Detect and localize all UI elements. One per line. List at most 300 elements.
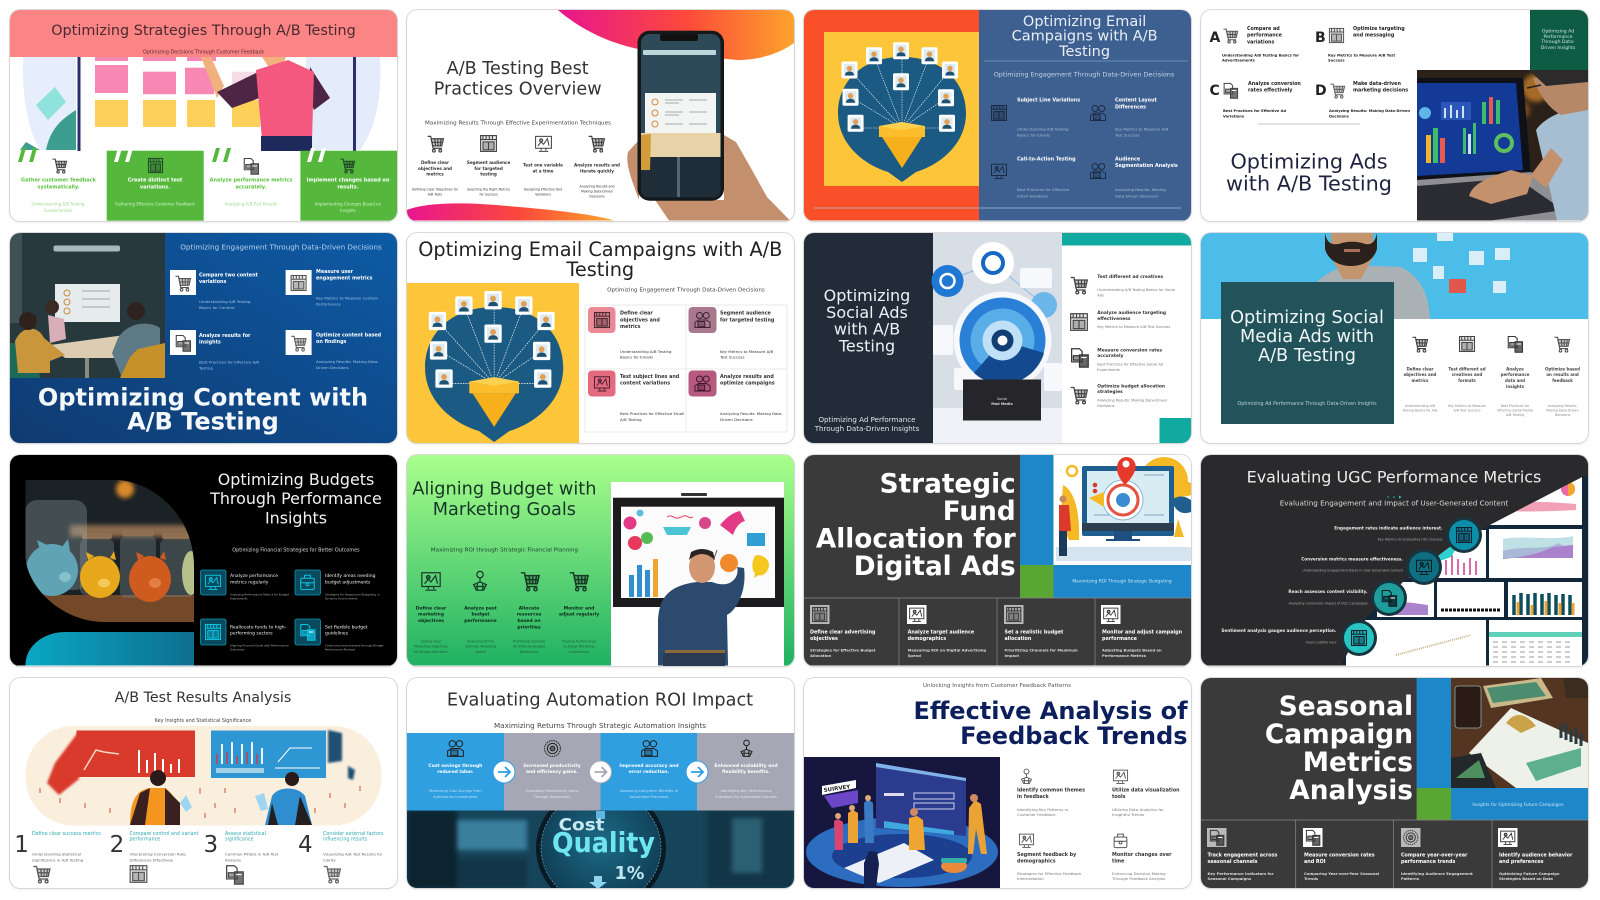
item: optimize: Driven Decisions bbox=[316, 364, 349, 370]
item: define: Define clear bbox=[620, 310, 653, 316]
subtitle: Optimizing Engagement Through Data-Driven Decisions bbox=[180, 242, 382, 251]
item: targeting: Key Metrics to Measure A/B Test Success bbox=[1097, 324, 1170, 328]
column: track: Track engagement across bbox=[1208, 852, 1277, 858]
item: define: metrics bbox=[620, 324, 641, 330]
column: analyze: Analyze target audience bbox=[908, 629, 975, 635]
item: segment: for targeted testing bbox=[720, 317, 775, 323]
step: optimize: Making Data-Driven bbox=[1546, 408, 1579, 412]
step: define bbox=[412, 136, 459, 196]
item C: Variations bbox=[1223, 114, 1245, 118]
step: segment: for Success bbox=[479, 192, 498, 196]
step 4: Visualizing A/B Test Results for bbox=[323, 851, 383, 856]
title box: Media Ads with bbox=[1240, 326, 1374, 346]
column: define: Allocation bbox=[810, 654, 831, 658]
step: productivity bbox=[504, 732, 601, 810]
subtitle: Maximizing Returns Through Strategic Automation Insights bbox=[494, 720, 706, 730]
step: monitor: Investments bbox=[569, 650, 589, 654]
dark sidebar: Optimizing bbox=[824, 286, 910, 304]
step: segment: testing bbox=[480, 172, 497, 177]
step: test: A/B Test Success bbox=[1453, 408, 1481, 412]
column: implement changes: Insights bbox=[340, 208, 356, 213]
step: cost savings: Measuring Cost Savings from bbox=[429, 788, 482, 792]
title: Optimizing Content with bbox=[38, 383, 368, 411]
step: define: objectives and bbox=[418, 166, 452, 171]
item: reallocate: performing sectors bbox=[230, 630, 273, 636]
step: test: Test one variable bbox=[523, 163, 563, 168]
step: define: Define clear bbox=[421, 160, 450, 165]
metric: engagement bbox=[1334, 517, 1482, 553]
metric: reach bbox=[1288, 580, 1407, 616]
item: themes: Customer Feedback bbox=[1017, 812, 1056, 816]
title: Seasonal bbox=[1279, 690, 1413, 722]
step: analyze: insights bbox=[1506, 384, 1525, 389]
item: budget: Decisions bbox=[1097, 404, 1115, 408]
column: budget: allocation bbox=[1004, 636, 1032, 642]
item B: Success bbox=[1328, 59, 1345, 63]
step: define: A/B Tests bbox=[428, 192, 443, 196]
arrow 2 bbox=[590, 760, 612, 782]
column: analyze metrics: accurately. bbox=[236, 184, 267, 190]
arrow 1 bbox=[493, 760, 515, 782]
panel: A/B Test Results Analysis bbox=[10, 678, 397, 888]
column: analyze: demographics bbox=[908, 636, 946, 642]
subtitle: Optimizing Engagement Through Data-Driven Decisions bbox=[994, 71, 1175, 79]
item: creatives: Test different ad creatives bbox=[1097, 274, 1163, 280]
step: analyze: Analyze past bbox=[464, 605, 498, 611]
arrow 3 bbox=[686, 760, 708, 782]
right accent blocks bbox=[1062, 232, 1191, 443]
step: analyze: Effective Social Media bbox=[1497, 408, 1533, 412]
step 3: Assess statistical bbox=[225, 830, 266, 836]
title: Evaluating UGC Performance Metrics bbox=[1247, 467, 1541, 486]
subtitle: Maximizing ROI through Strategic Financial Planning bbox=[431, 548, 578, 554]
column: implement changes bbox=[300, 148, 397, 221]
step 2: Differences Effectively bbox=[130, 857, 174, 862]
item: creatives: Understanding A/B Testing Basics for Social bbox=[1097, 288, 1175, 292]
item: segment: Strategies for Effective Feedback bbox=[1017, 870, 1082, 876]
item: call to action bbox=[992, 156, 1076, 199]
column: gather feedback: Understanding A/B Testing bbox=[32, 202, 85, 207]
item D: Analyzing Results: Making Data-Driven bbox=[1329, 109, 1411, 113]
panel: A/B Testing Best Practices Overview bbox=[407, 10, 794, 220]
panel: Aligning Budget with Marketing Goals bbox=[407, 455, 794, 666]
item: monitor: Monitor changes over bbox=[1112, 852, 1172, 858]
item: segment: Interpretation bbox=[1017, 876, 1044, 880]
item C: Best Practices for Effective Ad bbox=[1223, 109, 1286, 113]
column: implement changes: Implement changes based on bbox=[307, 178, 390, 184]
illustration: target dashboard: Social bbox=[997, 396, 1007, 400]
item: identify: Identify areas needing bbox=[325, 573, 376, 579]
item: analyze: metrics regularly bbox=[230, 579, 269, 585]
item: budget bbox=[1071, 383, 1167, 408]
step: optimize bbox=[1545, 337, 1580, 416]
column: track: Key Performance Indicators for bbox=[1208, 872, 1274, 876]
step: define: metrics bbox=[1412, 378, 1429, 383]
subtitle: Unlocking Insights from Customer Feedback Patterns bbox=[923, 682, 1071, 688]
column: monitor: Performance Metrics bbox=[1102, 654, 1147, 658]
item: conversion: Best Practices for Effective Social Ad bbox=[1097, 362, 1163, 366]
item: monitor: Enhancing Decision-Making bbox=[1112, 870, 1166, 876]
item D bbox=[1315, 81, 1411, 118]
step: define bbox=[414, 573, 448, 654]
photo: Cost Quality magnifier: Quality bbox=[552, 826, 655, 858]
step 1: 1 bbox=[14, 832, 29, 858]
column: compare bbox=[1401, 828, 1473, 880]
divider line bbox=[1201, 820, 1588, 888]
item: optimize bbox=[286, 330, 382, 370]
step: allocate: Prioritizing Channels bbox=[513, 640, 546, 644]
step: allocate: based on bbox=[517, 618, 541, 624]
fan graphic bbox=[407, 282, 579, 443]
item: audience segmentation: Analyzing Results: Making bbox=[1115, 187, 1166, 192]
item B: Key Metrics to Measure A/B Test bbox=[1328, 54, 1395, 58]
item A bbox=[1210, 26, 1299, 63]
illustration: survey scene bbox=[804, 756, 1000, 888]
metric: sentiment: Sentiment analysis gauges audience perception. bbox=[1221, 628, 1337, 633]
step: define: Understanding A/B bbox=[1405, 404, 1435, 408]
item: subject line bbox=[992, 98, 1080, 138]
title box: Optimizing Ad Performance Through Data-Driven Insights bbox=[1237, 400, 1377, 406]
title band: Optimizing Strategies Through A/B Testing bbox=[51, 23, 356, 39]
step: analyze: Analyzing Results and bbox=[579, 185, 615, 189]
column: compare: Patterns bbox=[1401, 876, 1420, 880]
step: define: Define clear bbox=[416, 605, 447, 611]
column: create variations: Create distinct test bbox=[128, 178, 183, 184]
step: allocate: Allocate bbox=[519, 605, 539, 611]
item: segment: demographics bbox=[1017, 858, 1056, 864]
item: compare: Compare two content bbox=[199, 272, 259, 278]
subtitle: Maximizing Results Through Effective Experimentation Techniques bbox=[425, 121, 611, 127]
item C bbox=[1210, 81, 1301, 118]
title: Digital Ads bbox=[854, 552, 1016, 582]
metric: engagement: Key Metrics for Evaluating UGC Success bbox=[1378, 538, 1443, 542]
step: define: Defining Clear Objectives for bbox=[412, 188, 459, 192]
step: test: Test different ad bbox=[1448, 366, 1486, 371]
step: segment bbox=[467, 136, 510, 196]
step 1: Significance in A/B Testing bbox=[32, 857, 84, 862]
item C: rates effectively bbox=[1248, 88, 1293, 94]
metric: sentiment: Insert subtitle here bbox=[1306, 641, 1336, 645]
panel: Optimizing Content with A/B Testing bbox=[10, 232, 397, 443]
photo: Cost Quality magnifier: Cost bbox=[558, 815, 604, 835]
column: monitor: Monitor and adjust campaign bbox=[1102, 629, 1183, 635]
accent blocks bbox=[1020, 455, 1191, 598]
item: audience segmentation bbox=[1090, 156, 1178, 199]
item: identify bbox=[295, 570, 380, 601]
dark sidebar: Optimizing Ad Performance bbox=[818, 414, 916, 424]
item: segment: Segment audience bbox=[720, 310, 771, 316]
item: analyze: Analyze performance bbox=[230, 573, 278, 579]
title: Campaigns with A/B bbox=[1012, 29, 1158, 45]
title: Testing bbox=[565, 258, 634, 280]
panel: Optimizing Social Media Ads with A/B Testing bbox=[1201, 232, 1588, 443]
step 3: Analysis bbox=[225, 857, 241, 862]
step 1: Define clear success metrics bbox=[32, 830, 101, 836]
column: gather feedback: systematically. bbox=[37, 184, 80, 190]
column: identify: Optimizing Future Campaign bbox=[1499, 872, 1560, 876]
step: allocate: resources bbox=[517, 612, 542, 618]
column: define bbox=[810, 605, 876, 658]
divider line bbox=[804, 598, 1191, 666]
column: monitor: performance bbox=[1102, 636, 1138, 642]
step: productivity: and efficiency gains. bbox=[526, 768, 578, 774]
item: themes: Identifying Key Patterns in bbox=[1017, 806, 1069, 812]
green tag: Through Data- bbox=[1540, 39, 1575, 45]
step 2: Compare control and variant bbox=[130, 830, 199, 836]
column: identify bbox=[1498, 828, 1573, 880]
step: monitor bbox=[559, 573, 599, 654]
column: monitor: Adjusting Budgets Based on bbox=[1102, 649, 1162, 653]
metric: engagement: Engagement rates indicate audience interest. bbox=[1334, 525, 1443, 530]
item: flexible: Set flexible budget bbox=[325, 624, 368, 630]
step: monitor: Monitor and bbox=[564, 605, 594, 611]
panel: Optimizing Strategies Through A/B Testing bbox=[10, 10, 397, 220]
step: allocate bbox=[513, 573, 546, 654]
step: scalability: Indicators for Automation Success bbox=[715, 794, 777, 798]
item: visualization: Insightful Trends bbox=[1112, 812, 1144, 816]
item: content layout bbox=[1090, 98, 1169, 138]
item: analyze bbox=[688, 370, 783, 422]
column: define: Define clear advertising bbox=[810, 629, 876, 635]
item: analyze: optimize campaigns bbox=[720, 380, 775, 386]
step: define: metrics bbox=[426, 172, 444, 177]
item: audience segmentation: Segmentation Analysis bbox=[1115, 163, 1178, 169]
step: analyze bbox=[1497, 336, 1533, 416]
step: analyze: budget bbox=[471, 612, 490, 618]
column: analyze bbox=[907, 605, 986, 658]
item B: B bbox=[1315, 30, 1326, 46]
column: measure: Trends bbox=[1304, 876, 1319, 880]
step: analyze bbox=[464, 571, 498, 654]
item A: Understanding A/B Testing Basics for bbox=[1222, 54, 1299, 58]
column: analyze metrics: Analyze performance metrics bbox=[210, 178, 292, 184]
step: test: Designing Effective Test bbox=[524, 188, 563, 192]
column: implement changes: results. bbox=[337, 184, 359, 190]
column: compare: Compare year-over-year bbox=[1401, 852, 1468, 858]
item: visualization: Utilizing Data Analytics for bbox=[1112, 806, 1164, 812]
step: accuracy: Automated Processes bbox=[630, 794, 669, 798]
item: content layout: Test Success bbox=[1114, 133, 1140, 138]
item: compare: variations bbox=[199, 279, 226, 285]
step 3: significance bbox=[225, 836, 254, 842]
step: analyze: performance bbox=[464, 618, 497, 624]
illustration: survey scene: SUIRVEY bbox=[823, 784, 852, 793]
step: optimize: Optimize based bbox=[1545, 366, 1580, 371]
item D: marketing decisions bbox=[1353, 88, 1408, 94]
subtitle: Optimizing Financial Strategies for Better Outcomes bbox=[232, 548, 360, 554]
subtitle: Key Insights and Statistical Significance bbox=[155, 717, 251, 723]
step 4: Consider external factors bbox=[323, 830, 384, 836]
item: compare bbox=[170, 270, 259, 309]
step 2: performance bbox=[130, 836, 160, 842]
title: Testing bbox=[1058, 44, 1110, 60]
item: conversion: Measure conversion rates bbox=[1097, 347, 1162, 353]
metric: reach: Reach assesses content visibility. bbox=[1288, 589, 1368, 594]
step: analyze: Analyzing ROI to bbox=[467, 640, 494, 644]
item: segment: Key Metrics to Measure A/B bbox=[720, 348, 774, 353]
item: compare: Basics for Content bbox=[199, 304, 235, 309]
title: with A/B Testing bbox=[1226, 172, 1392, 196]
step: scalability: flexibility benefits. bbox=[722, 768, 770, 774]
metric: conversion: Understanding Engagement Rates in User-Generated Content bbox=[1302, 568, 1404, 572]
step 3: Common Pitfalls in A/B Test bbox=[225, 851, 279, 856]
item: call to action: Call-to-Action Testing bbox=[1017, 156, 1076, 162]
item: reallocate bbox=[200, 619, 289, 652]
item: segment: Segment feedback by bbox=[1017, 852, 1077, 858]
item A: variations bbox=[1247, 39, 1274, 45]
item C: C bbox=[1210, 83, 1220, 99]
teal block bbox=[26, 632, 194, 666]
step: accuracy bbox=[600, 732, 697, 810]
step: scalability bbox=[697, 732, 794, 810]
panel: Effective Analysis of Feedback Trends bbox=[804, 678, 1191, 888]
title: Analysis bbox=[1289, 774, 1413, 806]
column: monitor bbox=[1101, 605, 1183, 658]
step: test: at a time bbox=[533, 169, 554, 174]
step: productivity: Through Automation bbox=[533, 794, 570, 798]
item A: Advertisements bbox=[1222, 59, 1256, 63]
title: Optimizing Budgets bbox=[218, 470, 374, 489]
dividers bbox=[984, 60, 1188, 62]
item: audience segmentation: Data-Driven Decisions bbox=[1115, 194, 1158, 199]
step: optimize: feedback bbox=[1552, 378, 1573, 383]
step: optimize: Analyzing Results: bbox=[1548, 404, 1577, 408]
item: audience segmentation: Audience bbox=[1115, 156, 1141, 162]
step: analyze: performance bbox=[1501, 372, 1530, 377]
photo: person at laptop analytics bbox=[1417, 70, 1588, 220]
step: analyze: Analyze bbox=[1506, 366, 1524, 371]
step: segment: for targeted bbox=[474, 166, 503, 171]
item: targeting: effectiveness bbox=[1097, 316, 1131, 322]
item: test: content variations bbox=[620, 380, 670, 386]
title: Metrics bbox=[1303, 746, 1413, 778]
column: analyze metrics: Analyzing A/B Test Results bbox=[225, 202, 277, 207]
item: themes: in feedback bbox=[1017, 794, 1050, 800]
item: measure: engagement metrics bbox=[316, 275, 373, 281]
item B bbox=[1315, 26, 1405, 63]
column: budget: Set a realistic budget bbox=[1004, 629, 1064, 635]
item: conversion: Experiments bbox=[1097, 368, 1120, 372]
illustration: hand holding phone bbox=[627, 31, 790, 221]
step: define: Define clear bbox=[1406, 366, 1434, 371]
item: measure: Key Metrics to Measure Content bbox=[316, 295, 379, 300]
column: create variations: Gathering Effective Customer Feedback bbox=[115, 202, 196, 207]
step: define: Setting Clear bbox=[421, 640, 442, 644]
step: allocate: priorities bbox=[517, 624, 541, 630]
item: monitor: Through Feedback Analysis bbox=[1111, 876, 1165, 880]
step 4: Clarity bbox=[323, 857, 336, 862]
step: test: Key Metrics to Measure bbox=[1448, 404, 1486, 408]
step: productivity: Evaluating Productivity Gains bbox=[526, 788, 579, 792]
item: content layout: Key Metrics to Measure A/B bbox=[1115, 127, 1169, 132]
title: Through Performance bbox=[209, 489, 382, 508]
item: measure bbox=[286, 268, 379, 306]
item: creatives: Ads bbox=[1097, 293, 1104, 297]
title: Strategic bbox=[880, 470, 1016, 500]
step: cost savings: Cost savings through bbox=[428, 762, 482, 768]
item: call to action: Email Variations bbox=[1017, 194, 1048, 199]
item: analyze: Analyzing Results: Making Data- bbox=[720, 410, 783, 416]
item: compare: Understanding A/B Testing bbox=[199, 298, 251, 303]
item: reallocate: Aligning Financial Goals with Performance bbox=[230, 644, 289, 648]
item: segment: Test Success bbox=[719, 354, 745, 359]
step 1 bbox=[14, 830, 101, 882]
column: identify: Strategies Based on Data bbox=[1499, 876, 1553, 880]
illustration: analysts with charts bbox=[26, 726, 382, 825]
column: analyze: Spend bbox=[908, 654, 921, 658]
item: content layout: Content Layout bbox=[1115, 98, 1158, 104]
column: gather feedback: Fundamentals bbox=[44, 208, 72, 213]
dashboard wedge bbox=[1341, 474, 1588, 666]
item: call to action: Best Practices for Effective bbox=[1017, 187, 1070, 192]
column: compare: Identifying Audience Engagement bbox=[1401, 872, 1473, 876]
step: accuracy: error reduction. bbox=[629, 768, 670, 774]
step: optimize: Decisions bbox=[1555, 412, 1571, 416]
column: budget bbox=[1004, 605, 1078, 658]
item: analyze: Testing bbox=[198, 365, 213, 370]
column: implement changes: Implementing Changes Based on bbox=[315, 202, 382, 207]
step: allocate: Distribution bbox=[520, 650, 538, 654]
column: create variations bbox=[107, 148, 204, 221]
step 4: 4 bbox=[298, 832, 313, 858]
item B: Optimize targeting bbox=[1353, 26, 1405, 32]
title: Optimizing Email Campaigns with A/B bbox=[418, 238, 782, 260]
item: segment bbox=[688, 306, 775, 359]
column: gather feedback bbox=[18, 148, 97, 213]
item: analyze: Analyze results for bbox=[199, 332, 251, 338]
panel: Optimizing Email Campaigns with A/B Testing (white) bbox=[407, 232, 794, 443]
dark sidebar: Testing bbox=[838, 336, 895, 355]
column: define: objectives bbox=[810, 636, 838, 642]
item: conversion bbox=[1072, 347, 1163, 372]
item: creatives bbox=[1071, 274, 1175, 297]
step: define: objectives bbox=[418, 618, 444, 624]
column: track: Seasonal Campaigns bbox=[1208, 876, 1252, 880]
item: define: objectives and bbox=[620, 317, 660, 323]
column: analyze: Measuring ROI on Digital Advertising bbox=[908, 649, 986, 653]
photo: Cost Quality magnifier bbox=[407, 786, 794, 900]
photo: report on desk bbox=[1451, 678, 1588, 788]
column: identify: Identify audience behavior bbox=[1499, 852, 1573, 858]
green tag: Driven Insights bbox=[1541, 45, 1576, 51]
title: Feedback Trends bbox=[960, 722, 1188, 750]
item: measure: Measure user bbox=[316, 268, 354, 274]
step: monitor: adjust regularly bbox=[559, 612, 599, 618]
item: monitor bbox=[1111, 834, 1172, 880]
item: reallocate: Reallocate funds to high- bbox=[230, 624, 287, 630]
column: compare: performance trends bbox=[1401, 858, 1455, 864]
item: flexible: Continuous Improvement through Budget bbox=[325, 644, 384, 648]
item: analyze bbox=[170, 330, 259, 370]
step 3 bbox=[204, 830, 279, 884]
item: test: Test subject lines and bbox=[620, 373, 680, 379]
item: conversion: accurately bbox=[1097, 352, 1124, 358]
item: optimize: Optimize content based bbox=[316, 332, 382, 338]
photo: man with floating icons bbox=[1201, 232, 1588, 318]
step 2: Interpreting Conversion Rate bbox=[130, 851, 186, 856]
step 3: 3 bbox=[204, 832, 218, 858]
step: define: for Budget Allocation bbox=[414, 650, 448, 654]
accent blocks: Maximizing ROI Through Strategic Budgeting bbox=[1072, 579, 1172, 585]
step: test: formats bbox=[1458, 378, 1476, 383]
column: define: Strategies for Effective Budget bbox=[810, 649, 876, 653]
item: analyze: Adjustments bbox=[230, 597, 248, 601]
item: identify: Strategies for Responsive Budgeting in bbox=[325, 593, 380, 597]
step: monitor: to Adjust Marketing bbox=[563, 645, 595, 649]
illustration: sticky-note wall with presenter bbox=[20, 57, 380, 151]
step: accuracy: Improved accuracy and bbox=[619, 762, 679, 768]
step: analyze: Spend bbox=[475, 650, 486, 654]
